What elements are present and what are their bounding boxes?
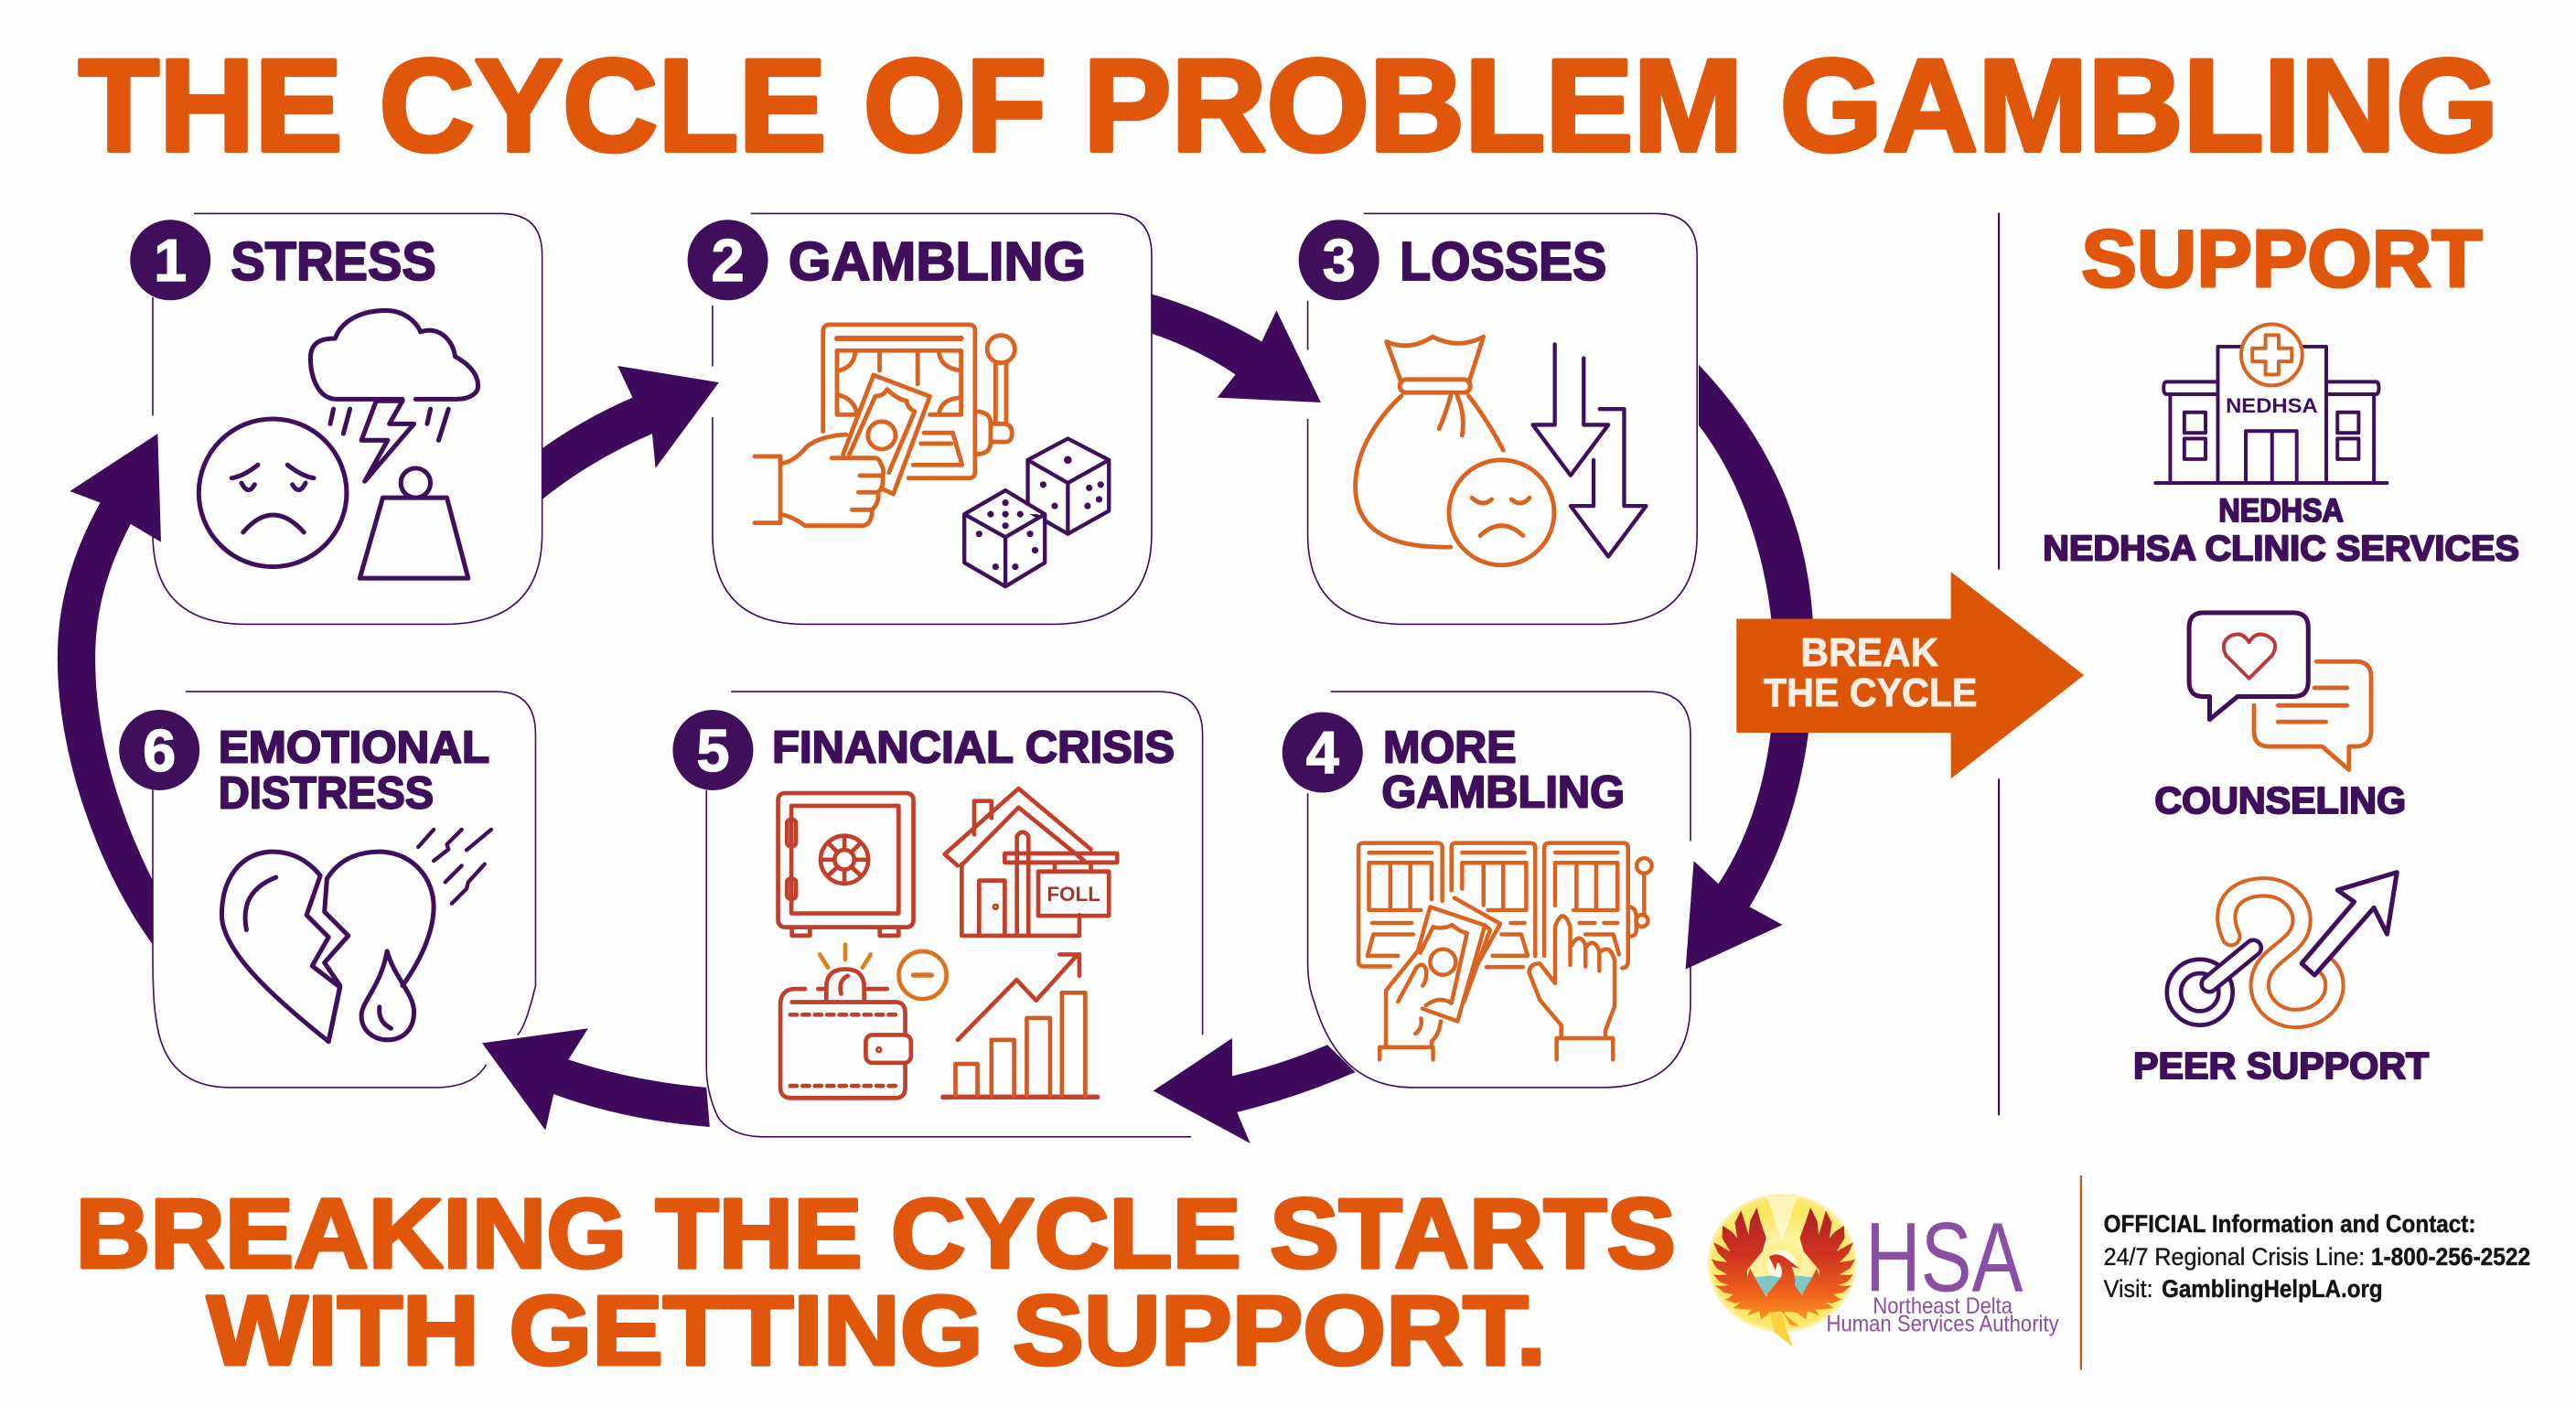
heading: emotional distress: [219, 722, 489, 819]
arrow: more gambling to financial crisis: [1154, 1038, 1356, 1143]
icon: down arrows: [1533, 344, 1647, 556]
label: nedhsa clinic services: NEDHSA: [2218, 493, 2344, 529]
step number 3: [1299, 220, 1379, 300]
contact information: GamblingHelpLA.org: [2162, 1275, 2383, 1303]
title: THE CYCLE OF PROBLEM GAMBLING: [79, 33, 2498, 179]
step number 5: 5: [696, 717, 729, 784]
heading: more gambling: GAMBLING: [1381, 767, 1625, 818]
arrow: break the cycle: THE CYCLE: [1764, 671, 1977, 715]
arrow: break the cycle: BREAK: [1800, 631, 1938, 675]
arrow: break the cycle: [1736, 572, 2084, 778]
step number 5: [672, 710, 753, 790]
icon: slot machine: [823, 325, 1014, 478]
icon: heavy weight: [360, 468, 468, 578]
panel: support: [1999, 213, 2519, 1115]
heading: more gambling: MORE: [1383, 722, 1517, 772]
sign text: FOLL: FOLL: [1046, 883, 1100, 906]
step number 1: [130, 220, 210, 300]
heading: support: SUPPORT: [2081, 213, 2483, 304]
footer message: [76, 1177, 1676, 1385]
arrow: emotional distress to stress: [58, 434, 161, 945]
icon: broken heart: [221, 852, 434, 1042]
icon: teardrop: [361, 951, 414, 1040]
icon: clinic building: NEDHSA: [2226, 394, 2318, 417]
panel: 3 losses: [1299, 213, 1697, 624]
label: nedhsa clinic services: [2043, 493, 2519, 568]
step number 6: 6: [143, 717, 176, 784]
step number 2: [688, 220, 768, 300]
icon: small sad face: [1449, 460, 1554, 565]
icon: slot machines: [1358, 843, 1652, 968]
contact information: 1-800-256-2522: [2371, 1243, 2530, 1271]
icon: hand with cash: [1379, 898, 1500, 1059]
logo: northeast delta hsa: [1708, 1194, 2059, 1347]
heading: emotional distress: EMOTIONAL: [219, 722, 489, 772]
icon: counseling chat bubbles: [2189, 613, 2371, 770]
arrow: financial crisis to emotional distress: [482, 1028, 710, 1131]
heading: emotional distress: DISTRESS: [219, 768, 434, 819]
contact information: OFFICIAL Information and Contact:: [2104, 1210, 2475, 1238]
icon: rising chart: [943, 954, 1098, 1097]
icon: pointing hand: [1530, 916, 1615, 1059]
contact information: [2104, 1210, 2530, 1303]
icon: storm cloud: [310, 310, 478, 481]
step number 3: 3: [1323, 227, 1356, 294]
heading: losses: LOSSES: [1400, 231, 1606, 292]
contact information: Visit:: [2104, 1275, 2153, 1303]
arrow: stress to gambling: [542, 366, 719, 499]
heading: stress: STRESS: [231, 231, 436, 292]
icon: stress marks: [418, 830, 491, 904]
step number 4: [1283, 713, 1363, 793]
label: nedhsa clinic services: NEDHSA CLINIC SERVICES: [2043, 529, 2519, 568]
label: counseling: COUNSELING: [2154, 779, 2406, 821]
footer message: WITH GETTING SUPPORT.: [207, 1274, 1546, 1385]
icon: clinic building: [2155, 325, 2387, 483]
step number 1: 1: [154, 227, 187, 294]
icon: safe: [778, 793, 914, 936]
logo: northeast delta hsa: HSA: [1865, 1202, 2023, 1313]
icon: money bag: [1356, 337, 1503, 547]
phoenix emblem: [1708, 1194, 1857, 1347]
heading: financial crisis: FINANCIAL CRISIS: [772, 722, 1175, 772]
panel: 1 stress: [130, 213, 542, 624]
logo: northeast delta hsa: Human Services Authority: [1827, 1312, 2059, 1337]
icon: empty wallet: [780, 945, 947, 1098]
panel: 2 gambling: [688, 213, 1152, 624]
icon: sad face: [199, 419, 347, 567]
step number 2: 2: [712, 227, 745, 294]
arrow: gambling to losses: [1152, 294, 1321, 402]
icon: peer support path: [2167, 873, 2397, 1025]
contact information: 24/7 Regional Crisis Line:: [2104, 1243, 2365, 1271]
logo: northeast delta hsa: Northeast Delta: [1873, 1293, 2012, 1319]
panel: 5 financial crisis: [672, 692, 1203, 1137]
step number 6: [119, 710, 199, 790]
icon: dice: [964, 439, 1109, 586]
panel: 4 more gambling: [1283, 692, 1690, 1088]
icon: hand holding cash: [755, 375, 929, 526]
panel: 6 emotional distress: [119, 692, 535, 1088]
footer message: BREAKING THE CYCLE STARTS: [76, 1177, 1676, 1288]
label: peer support: PEER SUPPORT: [2133, 1045, 2430, 1087]
heading: more gambling: [1381, 722, 1625, 818]
step number 4: 4: [1306, 719, 1339, 786]
icon: foreclosed house: [945, 788, 1117, 936]
heading: gambling: GAMBLING: [789, 231, 1086, 292]
arrow: losses to more gambling: [1686, 365, 1814, 970]
